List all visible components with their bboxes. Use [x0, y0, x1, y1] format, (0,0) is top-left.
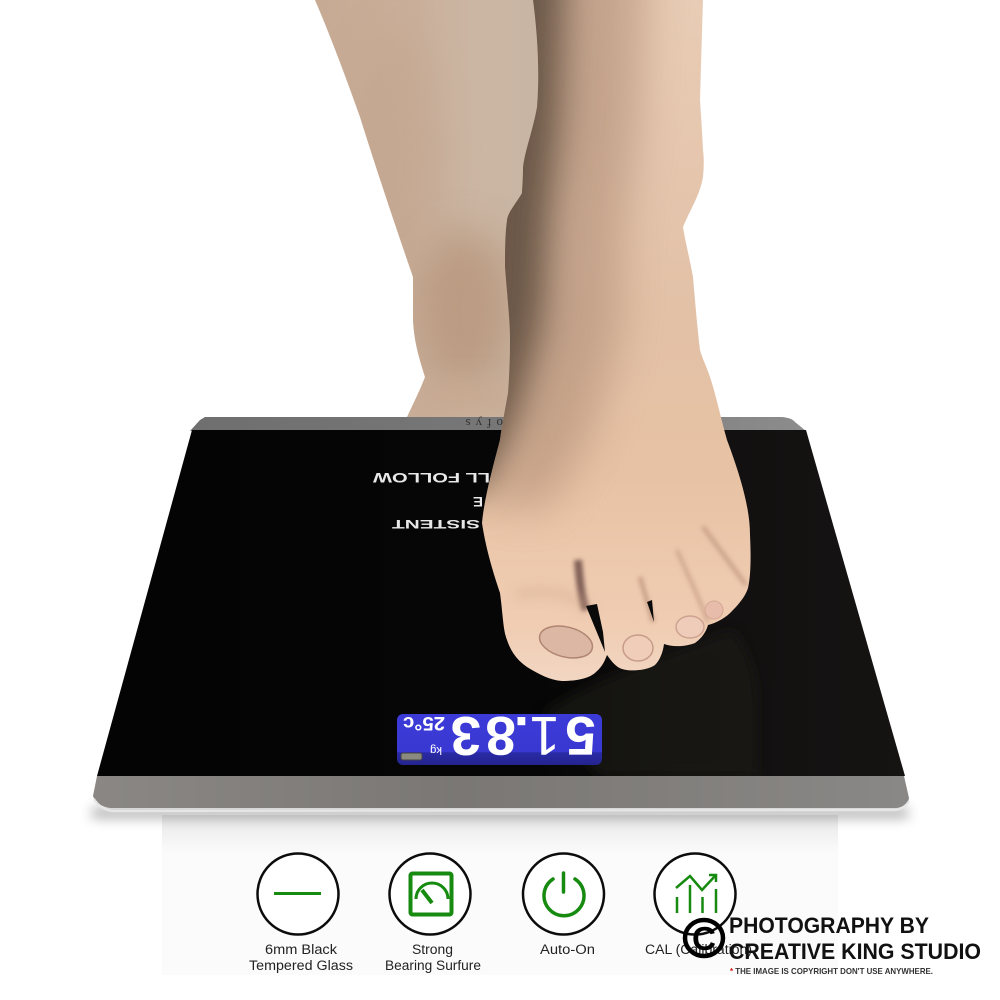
- copyright symbol: C: [692, 920, 716, 957]
- front foot: [482, 0, 751, 681]
- label: [385, 942, 481, 973]
- weight reading: .: [514, 705, 529, 767]
- temperature reading: 25°c: [403, 712, 445, 733]
- label: Strong: [412, 942, 453, 957]
- icon: power: [544, 873, 584, 916]
- toe gap small: [647, 600, 654, 622]
- second toenail: [623, 635, 653, 661]
- circle badge: [258, 854, 338, 934]
- toe gap: [586, 604, 605, 652]
- label: 6mm Black: [265, 942, 337, 957]
- watermark heading: CREATIVE KING STUDIO: [729, 939, 981, 964]
- glass surface: [97, 430, 905, 776]
- weight reading: 8: [485, 705, 516, 767]
- label: CAL (Calibration): [645, 942, 752, 957]
- icon: gauge: [410, 874, 452, 914]
- copyright symbol: [685, 920, 723, 957]
- circle badge: [390, 854, 470, 934]
- watermark note: * THE IMAGE IS COPYRIGHT DON'T USE ANYWHERE.: [730, 966, 933, 976]
- weight reading: 5: [565, 705, 596, 767]
- display panel: [397, 714, 602, 765]
- back leg: [315, 0, 538, 417]
- icon: glass line: [274, 892, 321, 895]
- unit label: kg: [430, 744, 442, 756]
- label: [249, 942, 353, 973]
- scale top edge strip: [190, 417, 806, 431]
- glass print text: LL FOLLOW: [372, 470, 490, 486]
- foot shading: [482, 0, 748, 624]
- watermark heading: PHOTOGRAPHY BY: [729, 913, 929, 938]
- feature: auto-on: [523, 854, 604, 957]
- watermark: [685, 913, 981, 976]
- circle badge: [523, 854, 604, 934]
- glass print text: E: [473, 494, 483, 510]
- label: Bearing Surfure: [385, 958, 481, 973]
- scale bottom edge strip: [93, 776, 909, 808]
- LCD display: [397, 705, 602, 767]
- toe creases: [578, 560, 586, 610]
- weight reading: 1: [529, 705, 560, 767]
- panel: feature strip background: [162, 815, 838, 975]
- bottom edge highlight: [94, 799, 909, 811]
- feature: strong bearing: [385, 854, 481, 973]
- label: Auto-On: [540, 942, 595, 957]
- glass print text: [372, 470, 490, 531]
- glass print text: SISTENT: [391, 517, 480, 531]
- circle badge: [654, 854, 736, 934]
- watermark heading: [729, 913, 981, 964]
- big toenail: [536, 621, 596, 663]
- battery icon: [401, 753, 422, 760]
- icon: chart: [676, 875, 716, 913]
- third toenail: [676, 616, 704, 638]
- brand name on strip: ofys: [461, 416, 503, 431]
- bathroom scale: [92, 416, 909, 818]
- scale shadow: [92, 808, 908, 818]
- feature: calibration: [645, 854, 752, 957]
- feature: tempered glass: [249, 854, 353, 973]
- glass reflection: [543, 630, 757, 776]
- foot shape: [482, 0, 751, 681]
- fourth toenail: [705, 601, 723, 619]
- feature icons row: [249, 854, 752, 973]
- label: Tempered Glass: [249, 958, 353, 973]
- weight reading: 3: [450, 705, 481, 767]
